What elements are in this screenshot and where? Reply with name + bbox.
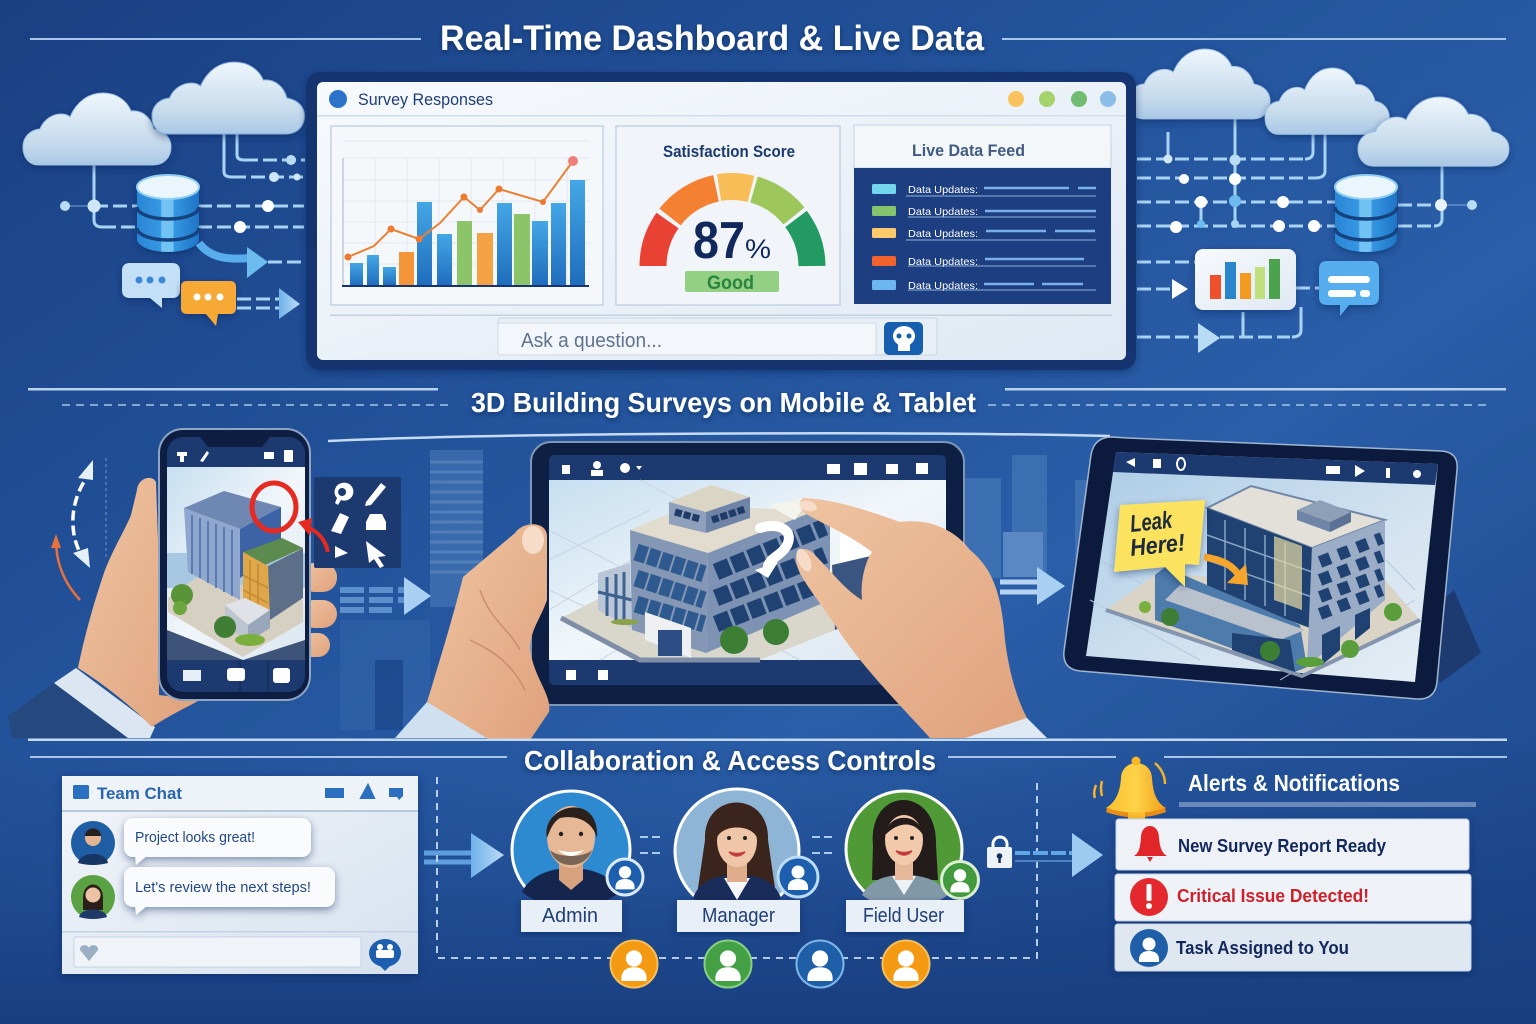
alert: new survey report: New Survey Report Ready xyxy=(1178,835,1387,856)
heading rule: top xyxy=(30,38,1506,40)
live data feed: Data Updates: xyxy=(908,184,978,196)
field user badge xyxy=(942,862,978,898)
admin portrait xyxy=(512,791,630,909)
divider xyxy=(330,314,1112,316)
mini chart card xyxy=(1137,249,1319,353)
chat header xyxy=(62,776,418,812)
icon: clouds xyxy=(1128,49,1509,166)
question input xyxy=(498,318,937,355)
tablet toolbar icons xyxy=(562,461,928,680)
annotation tool panel xyxy=(314,477,401,568)
panel: team chat xyxy=(62,776,418,974)
role connectors xyxy=(640,837,835,853)
avatar: chat user one xyxy=(71,821,115,865)
chat header: Team Chat xyxy=(97,784,182,803)
chat bubble: project looks great: Project looks great! xyxy=(135,830,255,846)
live data feed: Data Updates: xyxy=(908,206,978,218)
icon: alert bell xyxy=(1094,756,1166,821)
icon: padlock xyxy=(987,837,1012,868)
suit sleeve xyxy=(8,683,128,738)
icon: rotate gesture xyxy=(51,458,106,600)
icon: assistant button xyxy=(884,322,923,355)
fingers xyxy=(300,563,337,657)
user icon: orange second xyxy=(882,940,930,988)
icon: gesture question mark xyxy=(755,497,810,578)
dashed access boundary xyxy=(437,777,1037,958)
chat bubble: next steps: Let's review the next steps! xyxy=(135,880,311,896)
bar and line chart xyxy=(331,126,603,305)
window header xyxy=(317,90,1126,116)
field user portrait xyxy=(846,791,962,908)
alert: new survey report xyxy=(1116,819,1469,870)
live data feed xyxy=(854,125,1111,304)
user icon: blue xyxy=(796,940,844,988)
icon: database xyxy=(137,175,199,252)
title: real-time dashboard: Real-Time Dashboard & Live Data xyxy=(440,19,985,58)
sticky note: leak here xyxy=(1114,500,1205,587)
arrow: chat to dashboard xyxy=(237,288,300,319)
satisfaction gauge: 87 xyxy=(693,212,745,270)
chat bubble: next steps xyxy=(124,867,335,915)
section rules: 3D surveys xyxy=(28,388,1506,441)
thumb nail xyxy=(522,526,544,554)
admin label xyxy=(521,900,622,932)
arrow: phone to tablet xyxy=(340,577,431,615)
sticky note: leak here: Here! xyxy=(1129,529,1186,562)
role: manager xyxy=(675,789,818,932)
window header: Survey Responses xyxy=(358,91,493,109)
icon: red bell xyxy=(1134,826,1167,862)
manager label xyxy=(677,900,800,932)
section rules: collaboration xyxy=(28,738,1507,758)
palm xyxy=(427,524,549,740)
role: field user xyxy=(846,791,978,932)
shirt cuff xyxy=(54,668,155,738)
satisfaction gauge: Good xyxy=(707,273,754,294)
background skyline xyxy=(340,450,1095,730)
heading: 3D building surveys: 3D Building Surveys on Mobile & Tablet xyxy=(471,387,976,418)
right data network xyxy=(1128,49,1509,353)
role: admin xyxy=(512,791,643,932)
field user label: Field User xyxy=(863,905,944,927)
annotated tablet xyxy=(1064,437,1481,699)
live data feed: Data Updates: xyxy=(908,228,978,240)
admin label: Admin xyxy=(542,905,598,927)
arrow: roles to alerts xyxy=(1015,833,1103,877)
phone 3D model view xyxy=(167,467,305,660)
arrow: tablet to annotated tablet xyxy=(1000,567,1065,605)
right hand pinching xyxy=(793,498,1047,738)
icon: orange chat bubble xyxy=(181,281,236,326)
alert: critical issue: Critical Issue Detected! xyxy=(1177,885,1369,906)
phone bottom bar icons xyxy=(183,660,290,692)
icon: assignee xyxy=(1130,929,1168,967)
alert: critical issue xyxy=(1115,874,1471,921)
tablet toolbar xyxy=(1113,452,1438,485)
shirt cuff xyxy=(964,716,1047,738)
icon: message bubble xyxy=(1319,261,1379,316)
tablet 3D model view xyxy=(549,480,946,660)
icon: blue chat bubble xyxy=(122,263,180,308)
live data feed: Data Updates: xyxy=(908,256,978,268)
issue marker ring xyxy=(252,483,296,531)
panel: dashboard window xyxy=(306,72,1136,370)
field user label xyxy=(846,900,964,932)
connectors from clouds xyxy=(60,134,305,233)
palm xyxy=(78,478,200,727)
center tablet xyxy=(531,442,964,705)
chat input xyxy=(62,931,418,971)
arrow: database output xyxy=(199,243,305,278)
tablet body xyxy=(1064,437,1457,699)
user icon: orange xyxy=(610,940,658,988)
hand holding tablet xyxy=(395,524,549,740)
shirt cuff xyxy=(395,702,492,738)
phone xyxy=(159,429,310,700)
heading: collaboration: Collaboration & Access Controls xyxy=(524,745,936,776)
manager portrait xyxy=(675,789,799,913)
manager label: Manager xyxy=(702,905,775,927)
heading: alerts and notifications: Alerts & Notifications xyxy=(1188,770,1400,796)
avatar: chat user two xyxy=(71,875,115,919)
satisfaction gauge xyxy=(616,126,840,305)
tablet stand xyxy=(1420,590,1481,683)
phone toolbar icons xyxy=(177,450,293,462)
admin badge xyxy=(607,859,643,895)
orange callout arrow xyxy=(1204,557,1248,585)
rooftop unit xyxy=(1297,500,1351,532)
satisfaction gauge: % xyxy=(745,234,771,264)
arrow: red pointer xyxy=(298,518,328,552)
icon: clouds xyxy=(23,62,304,165)
icon: database xyxy=(1335,175,1397,252)
annotated 3D building xyxy=(1090,486,1420,680)
question input: Ask a question... xyxy=(521,330,662,352)
chat bubble: project looks great xyxy=(124,818,311,865)
live data feed: Live Data Feed xyxy=(912,141,1025,160)
alerts underline xyxy=(1179,802,1476,807)
icon: exclamation xyxy=(1130,878,1168,916)
connectors xyxy=(1137,119,1477,233)
sticky note: leak here: Leak xyxy=(1129,507,1175,538)
live data feed: Data Updates: xyxy=(908,280,978,292)
left hand holding phone xyxy=(8,478,337,738)
user icon: green xyxy=(704,940,752,988)
alert: task assigned: Task Assigned to You xyxy=(1176,937,1349,958)
user icon row xyxy=(610,940,930,988)
satisfaction gauge: Satisfaction Score xyxy=(663,142,795,161)
manager badge xyxy=(778,857,818,897)
alert: task assigned xyxy=(1115,924,1471,971)
left data network xyxy=(23,62,305,326)
arrow: chat to roles xyxy=(424,833,504,878)
